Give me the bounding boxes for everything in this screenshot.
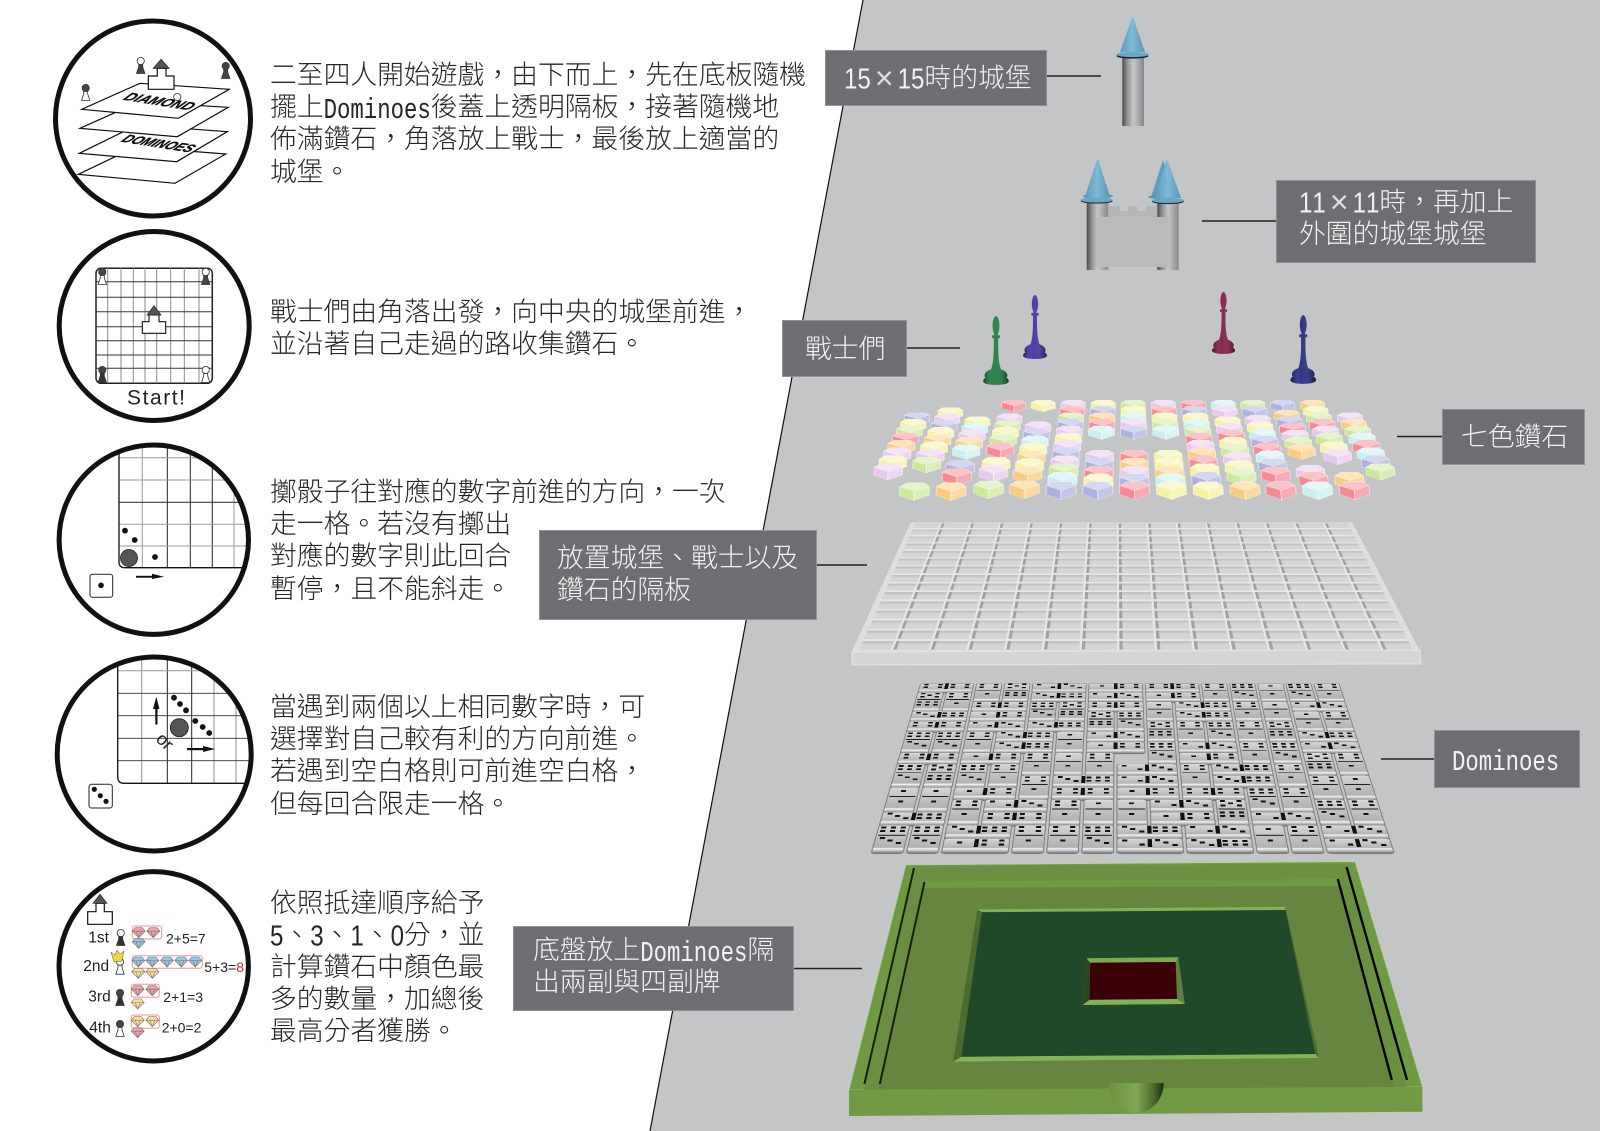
text: step 5: 計算鑽石中顏色最 <box>270 952 484 982</box>
or label: or <box>152 729 178 754</box>
icon: scoring <box>59 872 248 1061</box>
3rd row <box>88 984 203 1009</box>
warrior: purple <box>1023 295 1047 359</box>
text: step 3: 對應的數字則此回合 <box>270 541 511 571</box>
2nd row <box>83 950 244 978</box>
label: seven colour diamonds <box>1442 409 1585 465</box>
warrior: navy <box>1290 315 1316 384</box>
diamonds columns right <box>1208 400 1416 500</box>
tray front edge <box>852 650 1421 665</box>
text: step 1: 二至四人開始遊戲，由下而上，先在底板隨機 <box>270 60 806 90</box>
1st row: 1st <box>88 930 110 947</box>
label: warriors <box>782 320 907 377</box>
domino row 13 <box>871 825 1394 854</box>
label: 11x11 castle: 11 <box>1299 187 1326 220</box>
text: step 5: 多的數量，加總後 <box>270 984 484 1014</box>
pawns <box>82 57 230 101</box>
3rd row: 3rd <box>88 989 111 1006</box>
text: step 5: 1 <box>350 920 364 952</box>
thumb notch <box>1109 1083 1164 1113</box>
text: step 5 <box>270 888 484 1046</box>
text: step 5: 依照抵達順序給予 <box>270 888 484 918</box>
3rd row: 2+1=3 <box>163 989 203 1005</box>
warrior: green <box>983 316 1009 385</box>
2nd row: 2nd <box>83 958 109 975</box>
text: step 3 <box>270 477 726 604</box>
castle with wall for 11x11 <box>1081 159 1184 270</box>
text: step 5: 5 <box>270 920 283 952</box>
single tower castle for 15x15 <box>1116 16 1148 126</box>
text: step 1: 佈滿鑽石，角落放上戰士，最後放上適當的 <box>270 124 779 154</box>
icon: start board <box>59 232 249 420</box>
DOMINOES label: DOMINOES <box>118 132 199 155</box>
label: tray <box>539 530 817 620</box>
icon: single dice move <box>59 440 250 634</box>
storage grooves <box>864 867 1407 1084</box>
icon: dice one <box>90 574 113 597</box>
2nd row: 5+3=8 <box>204 959 244 975</box>
text: step 5: 最高分者獲勝。 <box>270 1016 458 1046</box>
domino row 0 <box>906 683 1355 733</box>
label: tray: 鑽石的隔板 <box>557 575 691 605</box>
arrow right <box>187 746 215 752</box>
text: step 1 <box>270 60 806 187</box>
text: step 5: 0 <box>391 920 404 952</box>
domino tiles layer <box>870 683 1394 854</box>
step icons <box>53 18 254 1064</box>
domino row 8 <box>879 764 1386 826</box>
text: step 2 <box>270 296 752 359</box>
warrior: crimson <box>1212 292 1235 354</box>
label: 15x15 castle: 15 <box>898 63 924 96</box>
DIAMOND label: DIAMOND <box>120 91 199 113</box>
text: step 4 <box>270 692 645 819</box>
label: 15x15 castle: 15 <box>844 63 871 96</box>
diamonds columns centre <box>1043 400 1226 500</box>
inner recess frame <box>953 907 1319 1062</box>
label: 15x15 castle: 時的城堡 <box>924 63 1032 93</box>
label: 15x15 castle: × <box>875 60 894 96</box>
4th row: 4th <box>89 1020 111 1037</box>
label: 15x15 castle <box>825 50 1047 106</box>
icon: choose direction <box>57 650 256 851</box>
arrow up <box>153 697 160 724</box>
panel: grey slanted background <box>650 0 1600 1131</box>
text: step 4: 當遇到兩個以上相同數字時，可 <box>270 692 645 722</box>
label: 11x11 castle: 外圍的城堡城堡 <box>1299 219 1487 249</box>
text: step 1: 擺上 後蓋上透明隔板，接著隨機地 <box>270 92 779 122</box>
domino row 4 <box>893 721 1369 777</box>
label: dominoes <box>1434 730 1580 788</box>
label: base board: Dominoes <box>640 936 747 970</box>
label: 11x11 castle: 時，再加上 <box>1379 187 1513 217</box>
dark green floor <box>961 910 1315 1057</box>
label: tray: 放置城堡、戰士以及 <box>557 543 798 573</box>
icon: stacked layers <box>56 21 250 216</box>
separator tray layer <box>852 522 1419 652</box>
1st row <box>88 926 206 948</box>
castle pictogram <box>148 68 174 89</box>
text: step 4: 若遇到空白格則可前進空白格， <box>270 756 645 786</box>
4th row <box>89 1015 202 1038</box>
label: warriors: 戰士們 <box>805 334 885 364</box>
text: step 3: 暫停，且不能斜走。 <box>270 574 511 604</box>
label: 11x11 castle: × <box>1330 184 1349 220</box>
text: step 5: 、 、 、 分，並 <box>283 920 484 950</box>
1st row: 2+5=7 <box>166 930 206 946</box>
text: step 1: Dominoes <box>324 93 431 127</box>
text: step 5: 3 <box>310 920 324 952</box>
label: 11x11 castle: 11 <box>1353 187 1379 220</box>
Start! caption: Start! <box>127 386 185 410</box>
centre hole frame <box>1083 957 1185 1005</box>
label: base board: 底盤放上 隔 <box>533 935 774 965</box>
green base board <box>849 862 1422 1116</box>
arrow right <box>136 574 164 579</box>
text: step 4: 但每回合限走一格。 <box>270 789 511 819</box>
4th row: 2+0=2 <box>162 1020 202 1036</box>
diamonds columns left <box>853 400 1058 501</box>
seven-colour diamonds layer <box>873 400 1396 501</box>
label: dominoes: Dominoes <box>1452 745 1559 779</box>
label: 11x11 castle <box>1276 180 1536 263</box>
text: step 3: 擲骰子往對應的數字前進的方向，一次 <box>270 477 726 507</box>
board front face <box>849 1087 1422 1116</box>
label: base board: 出兩副與四副牌 <box>533 967 721 997</box>
text: step 1: 城堡。 <box>270 157 350 187</box>
text: step 2: 並沿著自己走過的路收集鑽石。 <box>270 329 645 359</box>
dark red centre <box>1090 962 1177 1000</box>
label: base board <box>513 926 794 1011</box>
text: step 3: 走一格。若沒有擲出 <box>270 509 511 539</box>
text: step 4: 選擇對自己較有利的方向前進。 <box>270 724 645 754</box>
icon: dice three <box>89 784 112 808</box>
label: seven colour diamonds: 七色鑽石 <box>1461 422 1568 452</box>
text: step 2: 戰士們由角落出發，向中央的城堡前進， <box>270 296 752 326</box>
leader lines <box>794 76 1442 968</box>
